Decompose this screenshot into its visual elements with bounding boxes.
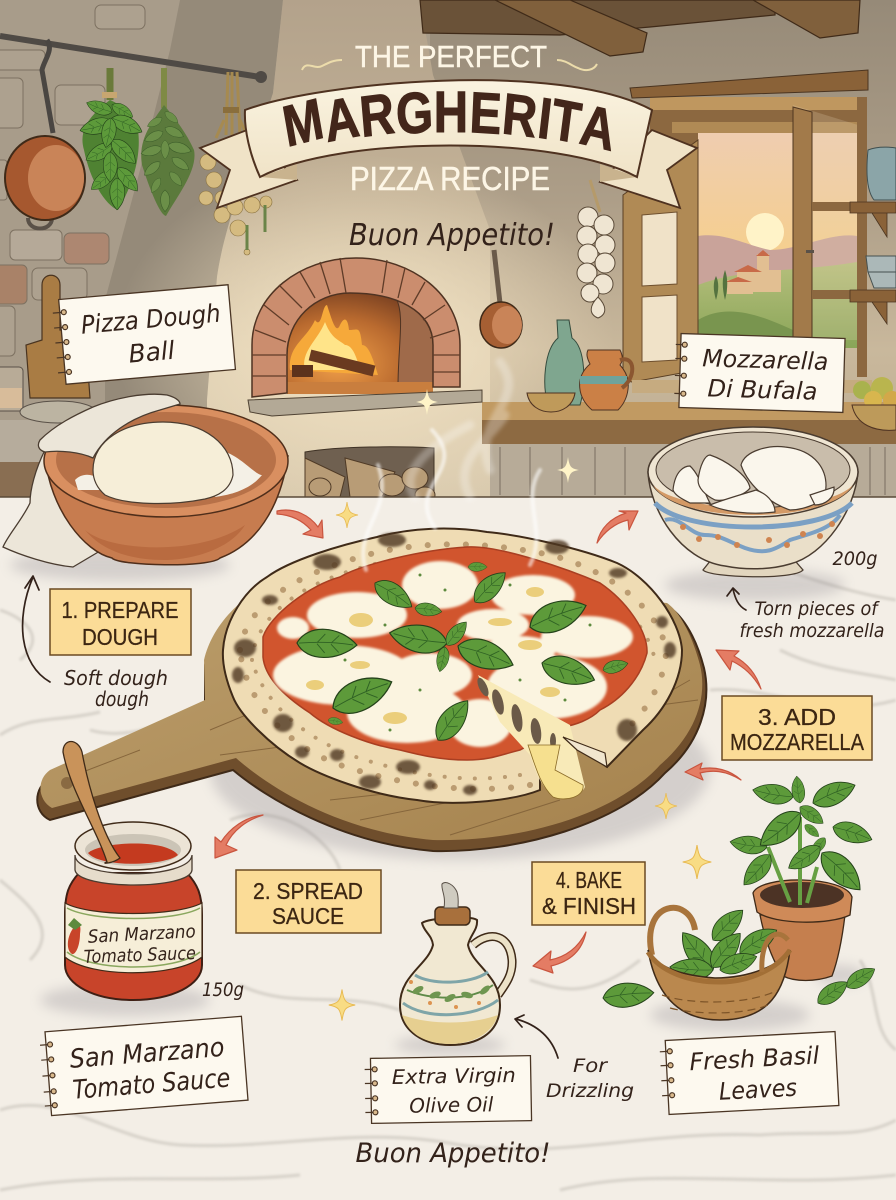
arrow: pizza to sauce — [215, 815, 263, 858]
firewood store — [305, 447, 435, 503]
tomato icon — [68, 918, 82, 954]
arrow: mozzarella to step 3 — [716, 650, 761, 689]
window — [623, 70, 872, 393]
icon: hanging herb bunch — [140, 68, 195, 216]
note: olive oil: Extra Virgin — [392, 1063, 516, 1089]
basil basket — [648, 903, 790, 1020]
tagline bottom: Buon Appetito! — [356, 1138, 550, 1169]
marble counter — [0, 497, 896, 1200]
note: fresh basil leaves: Leaves — [718, 1074, 798, 1106]
note: san marzano: San Marzano — [69, 1033, 225, 1075]
step 1 label: DOUGH — [82, 624, 158, 650]
wall shelves — [850, 147, 896, 324]
step 3 label — [722, 696, 872, 760]
step 4 label: & FINISH — [542, 893, 636, 919]
cheese toppings — [306, 587, 560, 724]
jar label text: San Marzano — [87, 921, 196, 948]
plaster hood — [207, 0, 490, 500]
annotation: weight 200g: 200g — [832, 548, 878, 570]
small hanging pan — [480, 250, 522, 348]
step 4 label — [532, 862, 645, 925]
hint arrows — [23, 576, 746, 1058]
note: san marzano: Tomato Sauce — [72, 1063, 231, 1106]
hanging pot rail — [0, 36, 272, 255]
cutting board — [26, 275, 90, 398]
wood fired oven — [248, 258, 482, 416]
arrow: pizza to mozzarella — [597, 511, 638, 543]
step arrows — [215, 510, 761, 973]
dough ball — [93, 422, 233, 504]
note: san marzano — [39, 1016, 248, 1116]
stone wall — [0, 5, 145, 356]
mozzarella bowl — [648, 427, 858, 577]
spoon — [63, 742, 120, 863]
jar label text: Tomato Sauce — [83, 943, 196, 968]
potted basil — [729, 775, 875, 980]
ceramics on counter — [527, 320, 896, 430]
dark chimney side — [105, 0, 283, 430]
lemons bowl — [852, 377, 896, 430]
note: mozzarella di bufala: Di Bufala — [707, 374, 818, 406]
annotation: soft dough — [64, 666, 168, 711]
left shutter — [623, 140, 698, 382]
sauce — [263, 547, 647, 760]
arrow: bowl to pizza — [277, 510, 323, 538]
step 2 label: SAUCE — [272, 903, 344, 929]
tagline top: Buon Appetito! — [349, 218, 555, 253]
note: pizza dough ball: Pizza Dough — [80, 299, 222, 340]
subtitle: PIZZA RECIPE — [350, 160, 550, 197]
title: margherita: MARGHERITA — [278, 80, 620, 164]
crust speckles — [240, 544, 666, 789]
dough bowl — [44, 405, 288, 565]
annotation: for drizzling — [546, 1055, 634, 1102]
arrow: bake to oil — [533, 932, 586, 973]
steam — [363, 362, 540, 570]
note: fresh basil leaves: Fresh Basil — [689, 1041, 820, 1076]
annotation: torn pieces: fresh mozzarella — [740, 620, 884, 642]
step 2 label — [236, 870, 381, 933]
step 4 label: 4. BAKE — [556, 867, 622, 893]
arrow: step 3 to pizza — [685, 763, 741, 780]
dough towel front — [38, 394, 180, 458]
mozzarella melts — [273, 561, 633, 747]
tomato sauce jar — [63, 742, 202, 1000]
sparkles — [329, 389, 711, 1021]
ceiling beams — [420, 0, 860, 56]
plates and jar — [0, 367, 96, 423]
flour — [75, 450, 262, 497]
annotation: weight 150g: 150g — [202, 979, 244, 1001]
note: pizza dough ball — [52, 285, 235, 385]
title banner — [200, 80, 697, 208]
note: olive oil — [364, 1056, 532, 1123]
note: fresh basil leaves — [659, 1032, 839, 1115]
step 3 label: 3. ADD — [758, 704, 836, 730]
kitchen background — [0, 0, 896, 525]
jug garland — [407, 980, 493, 1009]
decorative title: the perfect: THE PERFECT — [355, 39, 547, 74]
icon: copper pan — [5, 40, 85, 228]
step 1 label: 1. PREPARE — [62, 597, 178, 623]
note: olive oil: Olive Oil — [409, 1092, 494, 1118]
dough towel back — [3, 450, 105, 567]
margherita pizza — [223, 529, 682, 803]
icon: hanging basil bunch — [78, 68, 145, 210]
olive oil jug — [400, 883, 512, 1045]
annotation: torn pieces: Torn pieces of — [754, 598, 881, 620]
note: mozzarella di bufala: Mozzarella — [702, 344, 829, 376]
step 2 label: 2. SPREAD — [253, 878, 363, 904]
icon: dried herb bunch — [199, 72, 272, 255]
pizza peel — [37, 568, 706, 851]
cheese strings — [475, 675, 607, 799]
jar label text — [83, 921, 196, 968]
loose basil leaves — [602, 962, 879, 1010]
step 1 label — [50, 589, 191, 655]
soft shadows — [10, 549, 865, 1055]
mozzarella pieces — [673, 447, 834, 513]
note: mozzarella di bufala — [674, 333, 845, 412]
village — [714, 250, 781, 300]
plant leaves — [729, 775, 875, 898]
step 3 label: MOZZARELLA — [730, 729, 865, 755]
crust char spots — [232, 533, 676, 795]
counter shelf — [482, 402, 896, 420]
basil leaves — [297, 562, 629, 747]
annotation: for drizzling: For — [573, 1055, 608, 1077]
garlic string — [577, 180, 615, 318]
right open pane — [793, 97, 867, 377]
annotation: for drizzling: Drizzling — [546, 1080, 634, 1102]
note: pizza dough ball: Ball — [127, 336, 176, 369]
annotation: soft dough: dough — [95, 687, 149, 711]
annotation: soft dough: Soft dough — [64, 666, 168, 690]
herb specks — [344, 574, 592, 732]
annotation: torn pieces — [740, 598, 884, 642]
